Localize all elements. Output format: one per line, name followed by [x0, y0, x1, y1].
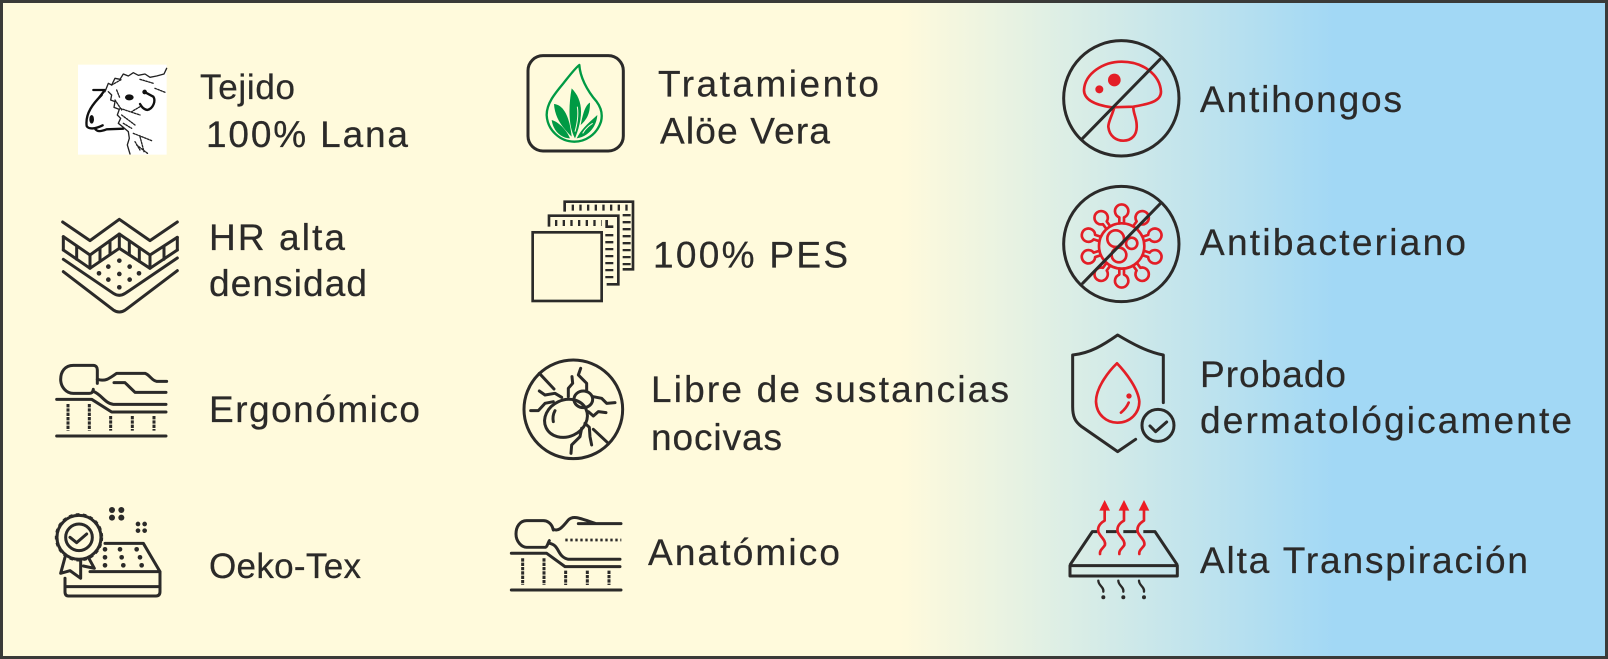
label: Tratamiento: Tratamiento [658, 64, 879, 104]
label: HR alta: HR alta [209, 217, 345, 258]
label: Alöe Vera: Alöe Vera [660, 110, 830, 152]
icon: person on anatomical mattress [511, 518, 621, 590]
icon: stacked fabric sheets [533, 202, 633, 301]
label: Ergonómico: Ergonómico [209, 389, 420, 430]
label: 100% Lana: 100% Lana [206, 114, 408, 155]
label: nocivas: nocivas [651, 417, 782, 458]
label: Antibacteriano: Antibacteriano [1200, 222, 1466, 263]
icon: sheep [78, 65, 167, 155]
label: Antihongos: Antihongos [1200, 79, 1402, 120]
icon: person on ergonomic mattress [57, 365, 167, 436]
label: Alta Transpiración: Alta Transpiración [1200, 540, 1528, 581]
item: Oeko-Tex [56, 507, 361, 596]
label: 100% PES: 100% PES [653, 234, 848, 276]
label: densidad: densidad [209, 263, 367, 304]
label: Tejido: Tejido [200, 68, 295, 107]
icon: layered foam mattress [63, 219, 177, 312]
item: HR alta densidad [63, 217, 367, 312]
item: 100% PES [533, 202, 848, 301]
icon: crossed bacteria [1064, 186, 1179, 302]
icon: certified mattress with rosette [56, 507, 160, 596]
item: Ergonómico [57, 365, 420, 436]
item: Antibacteriano [1064, 186, 1466, 302]
label: Probado: Probado [1200, 354, 1346, 395]
item: Libre de sustancias nocivas [524, 360, 1009, 459]
item: Anatómico [511, 518, 840, 590]
icon: crossed dust mite [524, 360, 623, 459]
item: Probado dermatológicamente [1073, 335, 1572, 452]
item: Tejido 100% Lana [78, 65, 408, 155]
icon: breathable mattress [1070, 500, 1177, 599]
item: Tratamiento Aloe Vera [528, 56, 879, 152]
label: Oeko-Tex: Oeko-Tex [209, 547, 362, 586]
item: Alta Transpiración [1070, 500, 1528, 599]
item: Antihongos [1064, 41, 1402, 156]
label: Anatómico: Anatómico [648, 532, 840, 573]
icon: aloe vera drop [528, 56, 623, 151]
icon: shield with drop and check [1073, 335, 1174, 452]
label: dermatológicamente: dermatológicamente [1200, 400, 1572, 441]
icon: crossed mushroom [1064, 41, 1179, 156]
label: Libre de sustancias: Libre de sustancias [651, 369, 1009, 410]
